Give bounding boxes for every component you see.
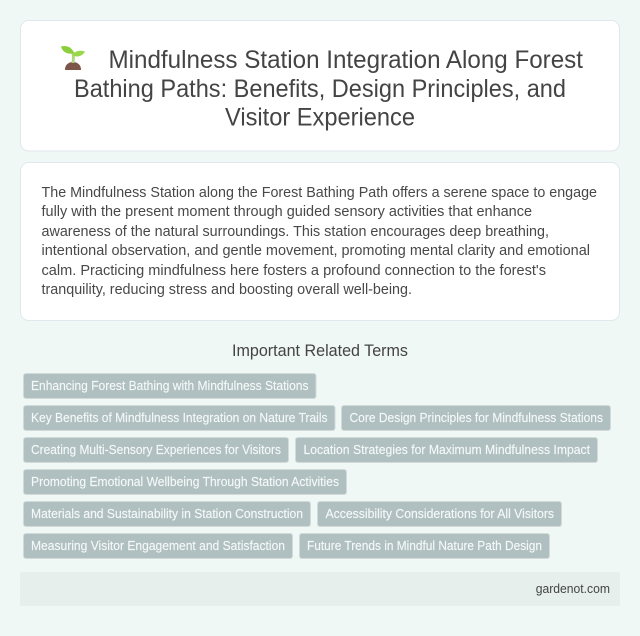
description text: The Mindfulness Station along the Forest Bathing Path offers a serene space to engage — [42, 185, 597, 201]
tag — [342, 406, 610, 430]
tag: Measuring Visitor Engagement and Satisfaction — [31, 539, 285, 553]
panel: title — [20, 20, 620, 151]
tag — [24, 502, 310, 526]
tag — [24, 534, 292, 558]
footer — [20, 572, 620, 606]
related terms tags — [24, 374, 610, 558]
title text — [74, 46, 583, 132]
tag: Enhancing Forest Bathing with Mindfulness Stations — [31, 379, 308, 393]
icon: sprout — [61, 46, 85, 70]
tag: Key Benefits of Mindfulness Integration on Nature Trails — [31, 411, 328, 425]
title text: Mindfulness Station Integration Along Forest — [108, 46, 583, 74]
tag — [24, 406, 335, 430]
tag — [318, 502, 562, 526]
tag — [296, 438, 598, 462]
description text: fully with the present moment through guided sensory activities that enhance — [42, 204, 532, 220]
tag — [24, 438, 288, 462]
title text: Bathing Paths: Benefits, Design Principles, and — [74, 75, 566, 103]
tag: Materials and Sustainability in Station Construction — [31, 507, 303, 521]
description text: tranquility, reducing stress and boosting overall well-being. — [42, 282, 412, 298]
tag: Creating Multi-Sensory Experiences for Visitors — [31, 443, 281, 457]
tag — [24, 470, 346, 494]
panel: description — [20, 162, 620, 320]
tag: Location Strategies for Maximum Mindfulness Impact — [304, 443, 590, 457]
tag: Core Design Principles for Mindfulness Stations — [350, 411, 603, 425]
heading: important related terms: Important Related Terms — [232, 342, 408, 360]
tag: Future Trends in Mindful Nature Path Design — [307, 539, 542, 553]
description text: calm. Practicing mindfulness here fosters a profound connection to the forest's — [42, 263, 546, 279]
footer source text: gardenot.com — [536, 581, 610, 596]
tag — [300, 534, 550, 558]
title text: Visitor Experience — [225, 104, 415, 132]
tag: Promoting Emotional Wellbeing Through Station Activities — [31, 475, 339, 489]
description text: awareness of the natural surroundings. This station encourages deep breathing, — [42, 224, 549, 240]
description text: intentional observation, and gentle movement, promoting mental clarity and emotional — [42, 243, 590, 259]
description text — [42, 185, 597, 298]
tag: Accessibility Considerations for All Visitors — [326, 507, 554, 521]
tag — [24, 374, 316, 398]
